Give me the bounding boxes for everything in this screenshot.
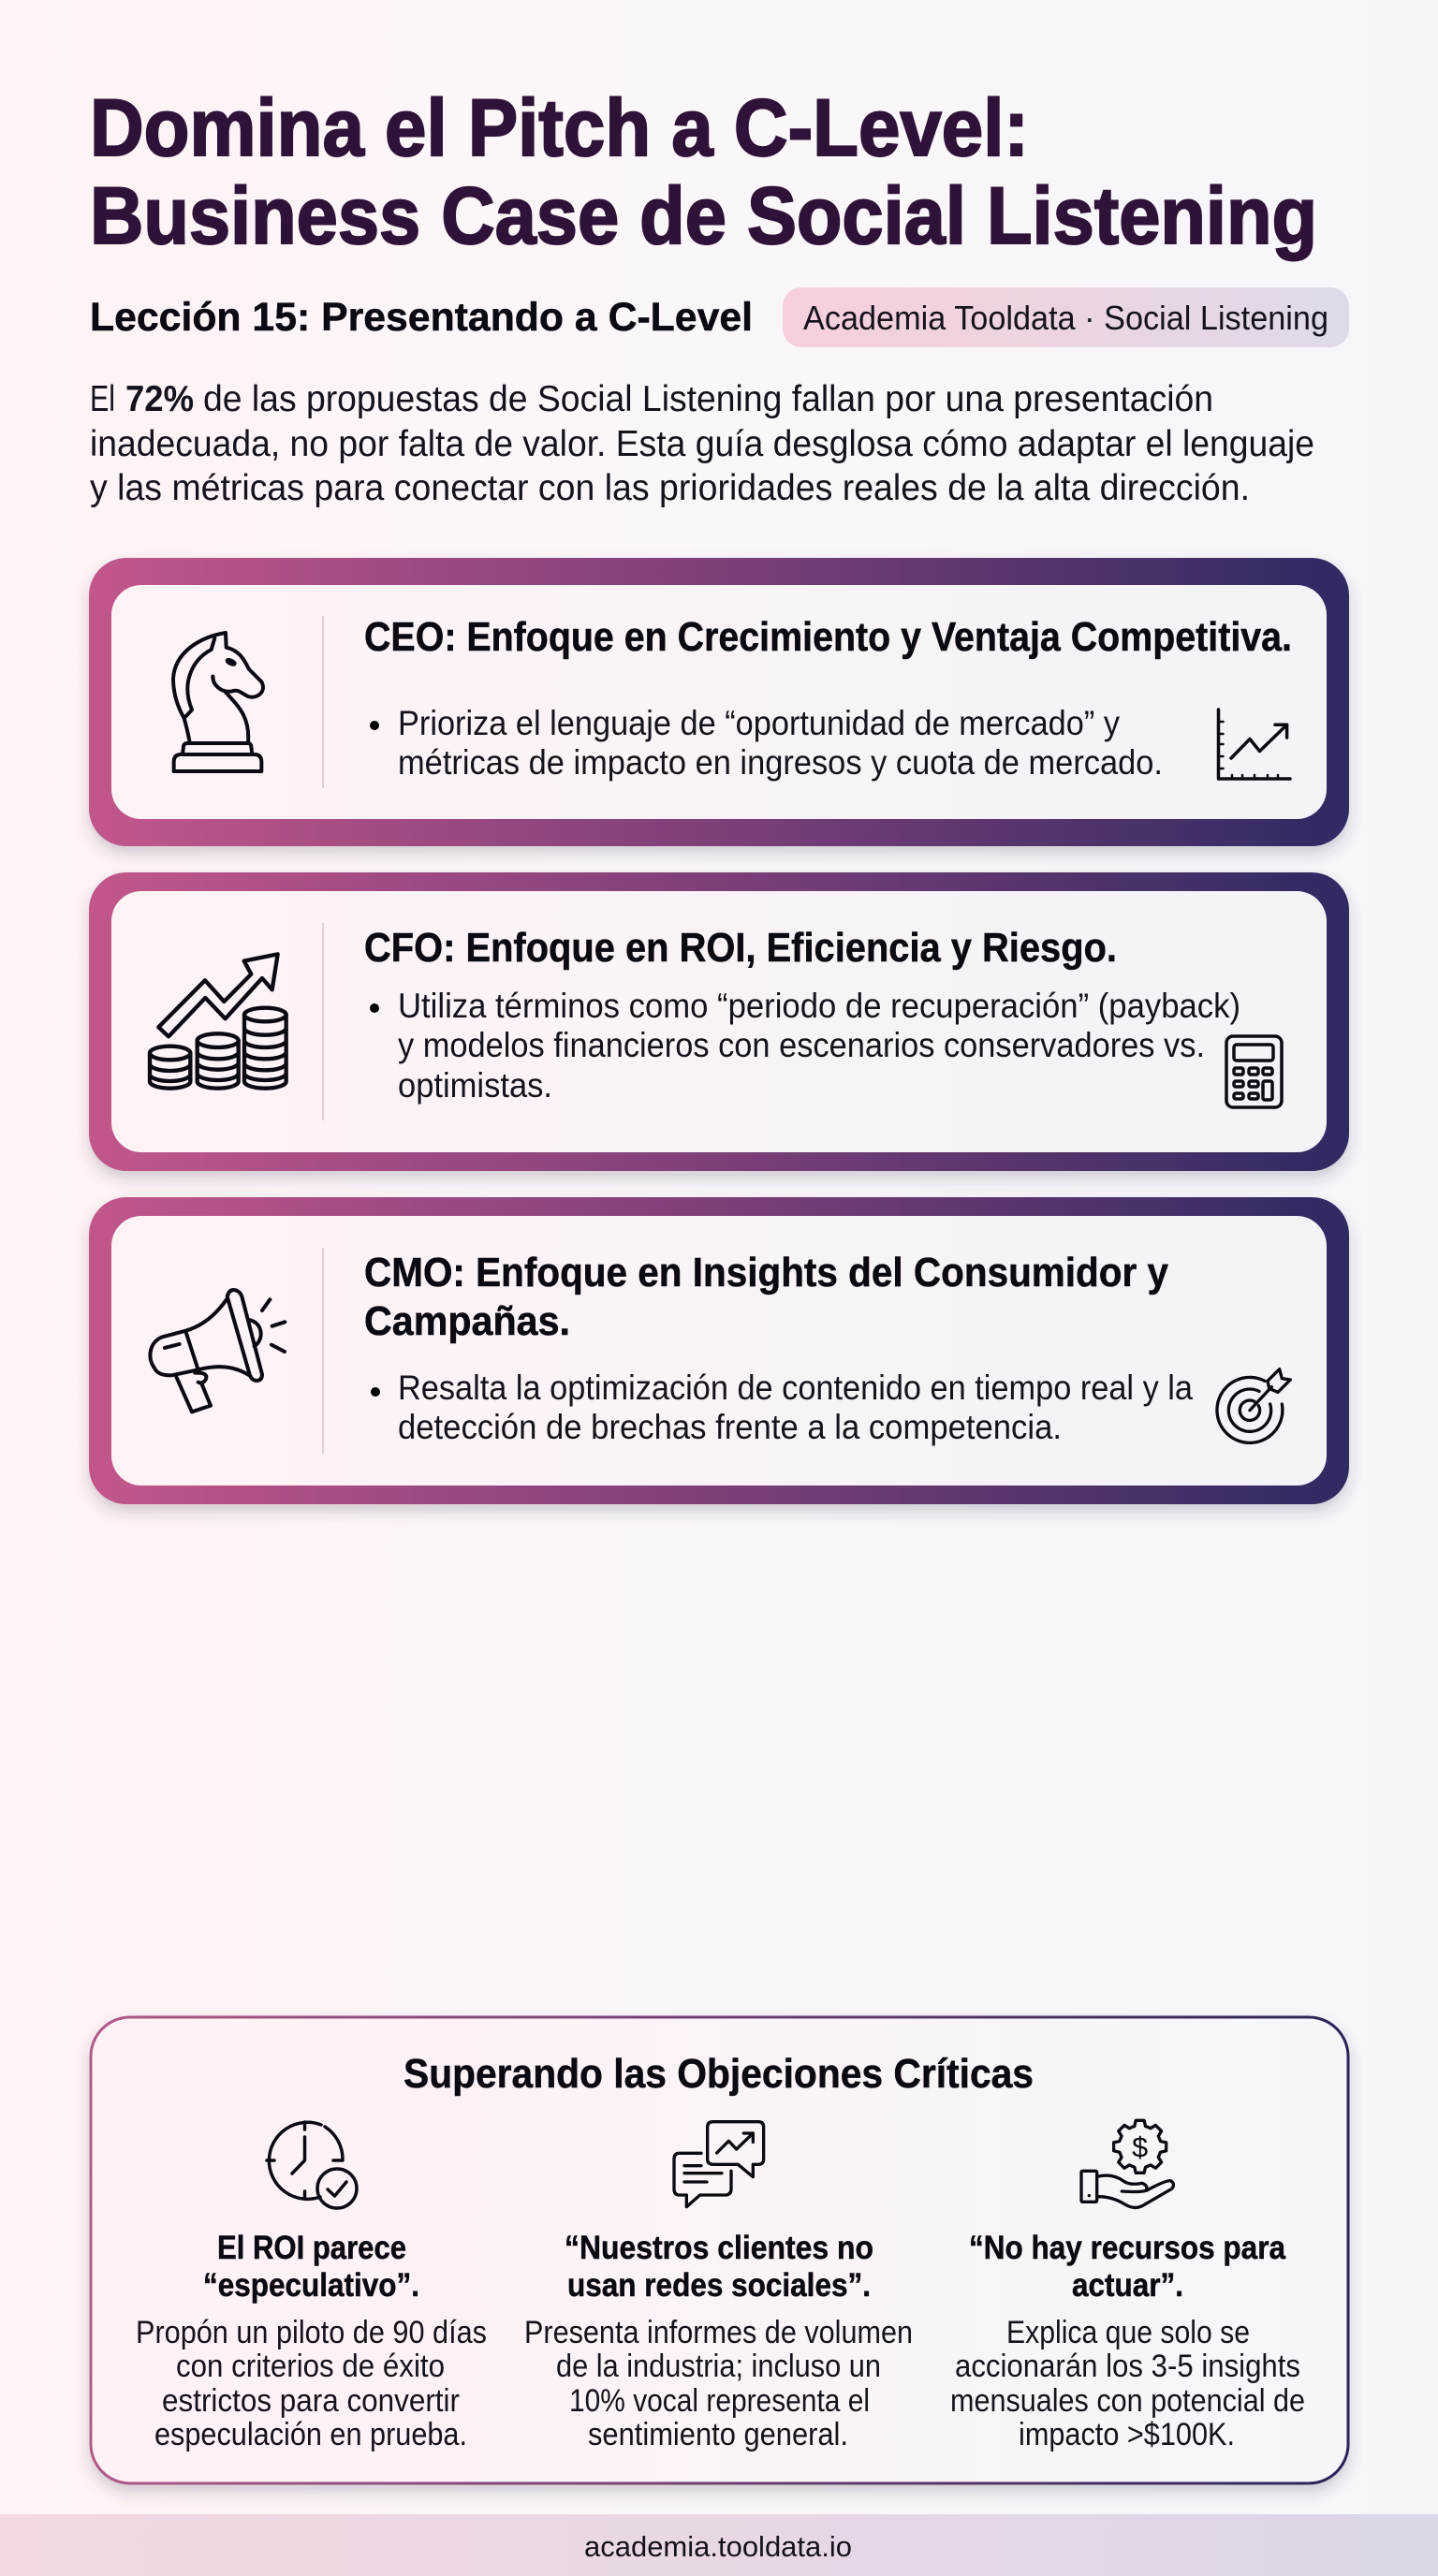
column: resources objection: impacto >$100K.: [1019, 2417, 1235, 2452]
heading: CMO: CMO: Enfoque en Insights del Consumidor y: [364, 1250, 1168, 1295]
icon: calculator: [1226, 1036, 1282, 1107]
bullet: CFO text: optimistas.: [398, 1066, 552, 1105]
badge: Academia Tooldata: Academia Tooldata · Social Listening: [803, 299, 1328, 337]
column: customers objection: usan redes sociales”.: [567, 2267, 871, 2304]
column: resources objection: “No hay recursos para: [969, 2230, 1285, 2266]
intro paragraph: de las propuestas de Social Listening fallan por una presentación: [203, 379, 1213, 419]
bullet: CEO text: [370, 704, 1163, 782]
heading: CEO: CEO: Enfoque en Crecimiento y Ventaja Competitiva.: [364, 614, 1292, 660]
badge: Academia Tooldata: [783, 287, 1349, 347]
bullet: CEO text: métricas de impacto en ingresos y cuota de mercado.: [398, 743, 1163, 782]
column: ROI objection: El ROI parece: [217, 2230, 406, 2266]
column: ROI objection: especulación en prueba.: [154, 2417, 467, 2452]
column: ROI objection: [136, 2230, 487, 2452]
column: ROI objection: estrictos para convertir: [162, 2383, 460, 2419]
intro paragraph: El: [90, 379, 115, 419]
icon: chess knight: [173, 633, 263, 771]
icon: hand with gear: [1081, 2120, 1174, 2207]
column: customers objection: de la industria; incluso un: [556, 2349, 881, 2384]
footer: [0, 2514, 1438, 2576]
column: customers objection: 10% vocal representa el: [569, 2383, 870, 2419]
intro paragraph: 72%: [125, 379, 194, 419]
bullet: CMO text: detección de brechas frente a la competencia.: [398, 1408, 1062, 1446]
panel: CMO: [89, 1197, 1349, 1504]
panel: CEO: [89, 558, 1349, 846]
title: Business Case de Social Listening: [90, 171, 1317, 261]
title: Domina el Pitch a C-Level:: [90, 83, 1029, 173]
panel: objections: [91, 2017, 1348, 2483]
heading: objections: Superando las Objeciones Críticas: [404, 2051, 1034, 2097]
icon: megaphone: [150, 1290, 285, 1412]
heading: CMO: Campañas.: [364, 1298, 570, 1344]
bullet: CMO text: [371, 1368, 1193, 1446]
column: customers objection: Presenta informes de volumen: [524, 2315, 913, 2350]
heading: CFO: CFO: Enfoque en ROI, Eficiencia y Riesgo.: [364, 925, 1117, 971]
bullet: CEO text: Prioriza el lenguaje de “oportunidad de mercado” y: [398, 704, 1120, 742]
column: resources objection: accionarán los 3-5 insights: [955, 2349, 1300, 2384]
intro paragraph: y las métricas para conectar con las prioridades reales de la alta dirección.: [90, 468, 1250, 508]
column: customers objection: sentimiento general.: [588, 2417, 848, 2452]
icon: coins with arrow: [150, 954, 286, 1089]
icon: clock with check: [267, 2122, 357, 2208]
column: customers objection: [524, 2230, 913, 2452]
title: [90, 83, 1317, 261]
subtitle: lesson: Lección 15: Presentando a C-Level: [90, 295, 753, 340]
intro paragraph: inadecuada, no por falta de valor. Esta guía desglosa cómo adaptar el lenguaje: [90, 424, 1314, 464]
column: ROI objection: “especulativo”.: [203, 2267, 419, 2304]
bullet: CMO text: Resalta la optimización de contenido en tiempo real y la: [398, 1368, 1193, 1407]
intro paragraph: [90, 379, 1314, 508]
column: resources objection: [950, 2230, 1305, 2452]
column: resources objection: mensuales con potencial de: [950, 2383, 1305, 2419]
icon: target with arrow: [1217, 1369, 1290, 1442]
panel: CFO: [89, 872, 1349, 1171]
bullet: CFO text: Utiliza términos como “periodo de recuperación” (payback): [398, 987, 1240, 1025]
column: resources objection: actuar”.: [1072, 2267, 1183, 2304]
column: ROI objection: con criterios de éxito: [176, 2349, 445, 2384]
column: resources objection: Explica que solo se: [1006, 2315, 1250, 2350]
footer: academia.tooldata.io: [584, 2530, 852, 2563]
bullet: CFO text: [370, 987, 1240, 1105]
heading: CMO: [364, 1250, 1168, 1344]
column: customers objection: “Nuestros clientes no: [565, 2230, 873, 2266]
icon: hand with gear: $: [1132, 2131, 1148, 2163]
column: ROI objection: Propón un piloto de 90 días: [136, 2315, 487, 2350]
bullet: CFO text: y modelos financieros con escenarios conservadores vs.: [398, 1026, 1205, 1064]
icon: line chart: [1219, 710, 1290, 779]
icon: chat bubbles with chart: [674, 2122, 764, 2207]
